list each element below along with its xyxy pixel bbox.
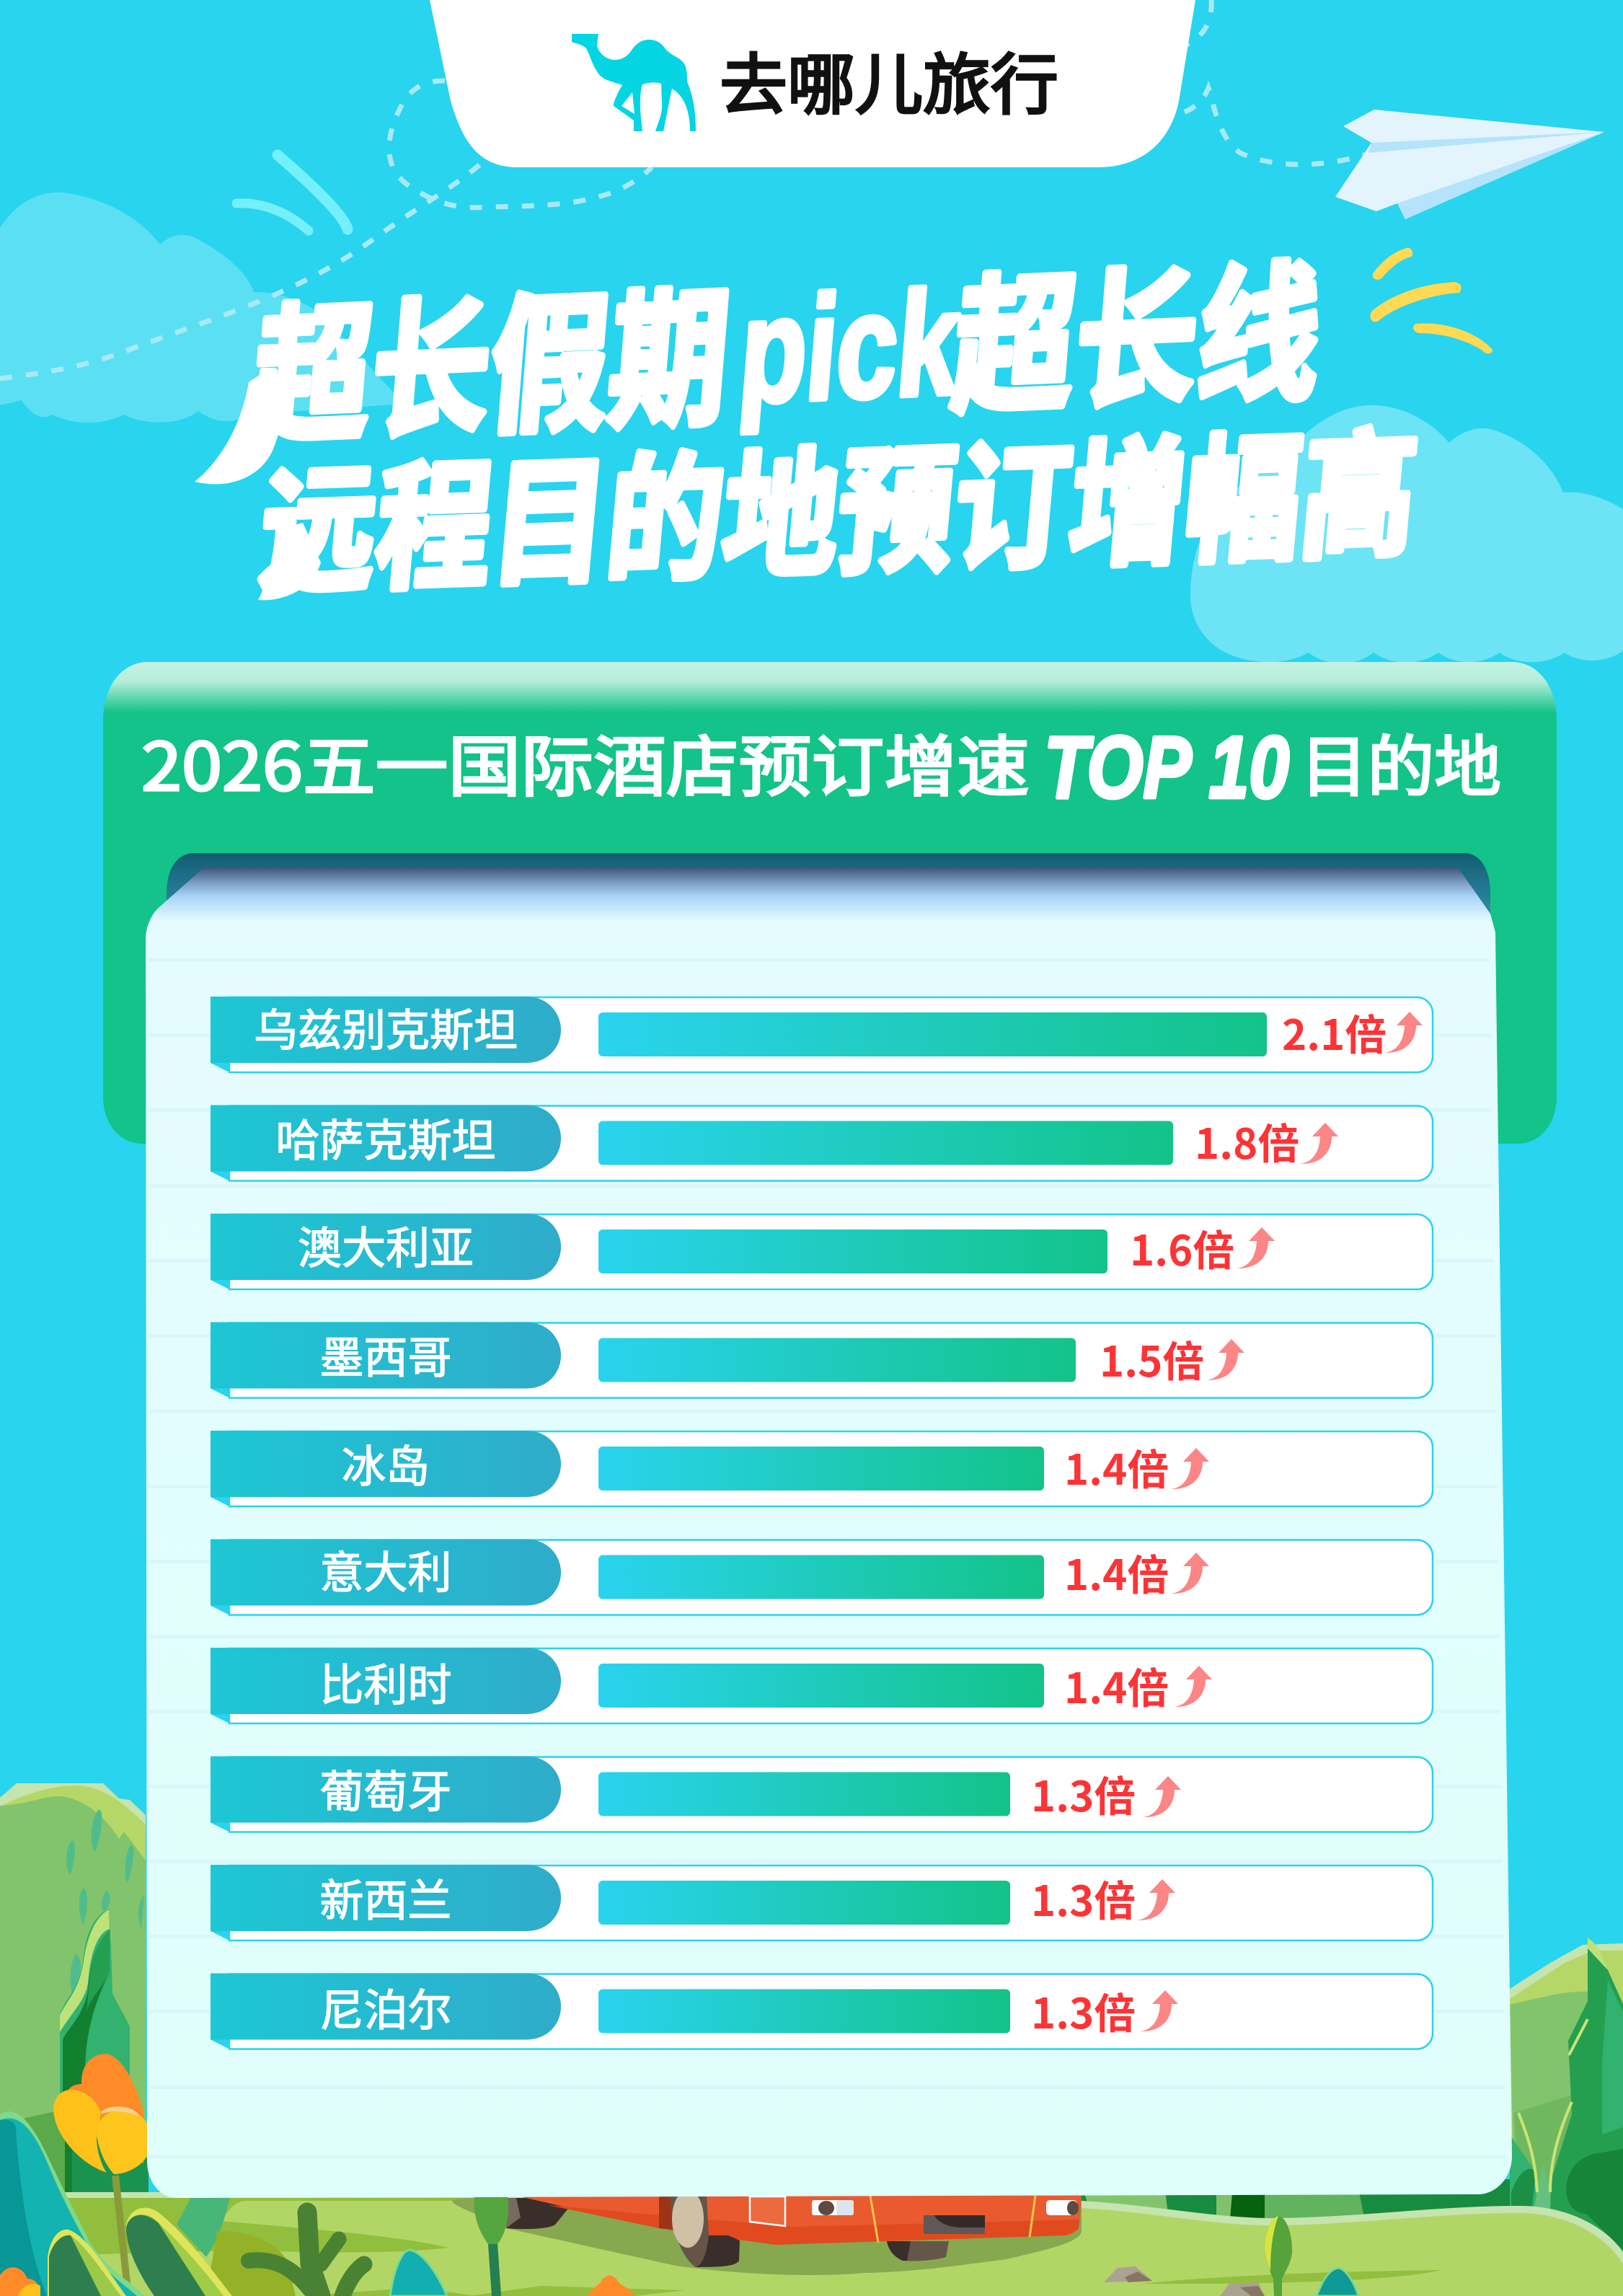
row 2: 哈萨克斯坦: 1.8倍 <box>1195 1111 1299 1171</box>
row 7: 比利时 <box>211 1648 1433 1723</box>
row 3: 澳大利亚 <box>211 1212 1433 1289</box>
hedge base <box>0 2109 65 2192</box>
row 5: 冰岛: 冰岛 <box>342 1431 430 1495</box>
heading <box>141 714 1501 816</box>
plant: olive blob <box>206 2231 296 2296</box>
title line 1 <box>195 213 1330 484</box>
heading: 2026五一国际酒店预订增速 <box>141 714 1030 810</box>
row 10: 尼泊尔 <box>211 1973 1433 2049</box>
heading: TOP 10: TOP 10 <box>1044 718 1289 816</box>
panel: green header card <box>103 662 1557 1144</box>
icon: paper plane <box>1335 110 1604 219</box>
plant: big spotted leaf <box>126 2208 232 2296</box>
row 9: 新西兰: 新西兰 <box>319 1865 452 1929</box>
row 2: 哈萨克斯坦: 哈萨克斯坦 <box>275 1105 496 1169</box>
plant: right teal leaf <box>1317 2268 1358 2296</box>
bus lights <box>812 2200 854 2215</box>
row 8: 葡萄牙: 1.3倍 <box>1031 1763 1136 1824</box>
cloud: left <box>0 193 404 423</box>
plant: bottom orange flower <box>587 2276 634 2296</box>
panel: white ranking sheet <box>146 867 1512 2198</box>
rocks <box>1104 2266 1265 2296</box>
scenery: right hill <box>1510 1938 1623 2257</box>
icon: camel <box>572 34 696 131</box>
right hill lower band <box>1510 2134 1539 2214</box>
title line 1: 超长线 <box>945 213 1330 444</box>
row 4: 墨西哥: 1.5倍 <box>1100 1328 1204 1389</box>
bus wheels <box>685 2235 740 2267</box>
plant: centre bud <box>474 2197 508 2296</box>
row 10: 尼泊尔: 尼泊尔 <box>319 1974 452 2039</box>
row 1: 乌兹别克斯坦 <box>211 994 1433 1072</box>
row 10: 尼泊尔: 1.3倍 <box>1031 1980 1136 2041</box>
row 6: 意大利: 意大利 <box>319 1537 452 1601</box>
heading: 目的地 <box>1301 714 1501 810</box>
row 6: 意大利: 1.4倍 <box>1064 1542 1169 1602</box>
plant: dark green sprout <box>249 2212 364 2296</box>
bus shadow <box>452 2198 1082 2275</box>
row 9: 新西兰 <box>211 1865 1433 1940</box>
row 8: 葡萄牙: 葡萄牙 <box>319 1756 452 1820</box>
row 1: 乌兹别克斯坦: 2.1倍 <box>1282 1002 1387 1062</box>
title line 2: 远程目的地预订增幅高 <box>253 384 1427 621</box>
row 1: 乌兹别克斯坦: 乌兹别克斯坦 <box>254 994 518 1059</box>
row 6: 意大利 <box>211 1537 1433 1615</box>
illustration: red bus <box>452 2190 1082 2275</box>
scenery: back hedge right <box>1067 2178 1623 2257</box>
plant: right bud <box>1265 2216 1292 2296</box>
doodle: yellow arcs <box>1370 247 1492 353</box>
panel: paper slot <box>167 853 1490 937</box>
row 7: 比利时: 1.4倍 <box>1064 1655 1169 1716</box>
row 3: 澳大利亚: 澳大利亚 <box>298 1212 474 1276</box>
bus grille <box>924 2215 985 2234</box>
row 4: 墨西哥: 墨西哥 <box>319 1322 452 1386</box>
scenery: ground <box>0 2192 1623 2296</box>
bus door <box>750 2196 785 2226</box>
cloud: right <box>1190 405 1623 663</box>
plant: teal small leaf <box>390 2250 447 2296</box>
plant: teal upright leaf <box>177 2197 230 2257</box>
logo plate <box>430 0 1195 167</box>
row 8: 葡萄牙 <box>211 1756 1433 1832</box>
left green tower <box>60 1909 130 2192</box>
row 9: 新西兰: 1.3倍 <box>1031 1868 1136 1928</box>
plant: flower <box>53 2054 147 2296</box>
row 4: 墨西哥 <box>211 1322 1433 1398</box>
right green tower <box>1550 1938 1623 2257</box>
logo text: 去哪儿旅行 <box>720 32 1058 128</box>
title <box>195 213 1427 621</box>
scenery: left hill <box>0 1783 149 2199</box>
row 2: 哈萨克斯坦 <box>211 1105 1433 1181</box>
plant: small spotted leaf <box>48 2230 126 2296</box>
doodle: cyan arcs <box>236 155 348 231</box>
plant: small orange flower <box>0 2267 40 2296</box>
row 5: 冰岛: 1.4倍 <box>1064 1436 1169 1497</box>
title line 1: 超长假期 <box>245 237 738 474</box>
row 7: 比利时: 比利时 <box>319 1649 452 1713</box>
title line 1: pick <box>734 259 965 434</box>
row 5: 冰岛 <box>211 1431 1433 1506</box>
dashed flight paths <box>0 0 1371 379</box>
plant: big teal leaf <box>0 2111 144 2296</box>
row 3: 澳大利亚: 1.6倍 <box>1130 1217 1234 1278</box>
